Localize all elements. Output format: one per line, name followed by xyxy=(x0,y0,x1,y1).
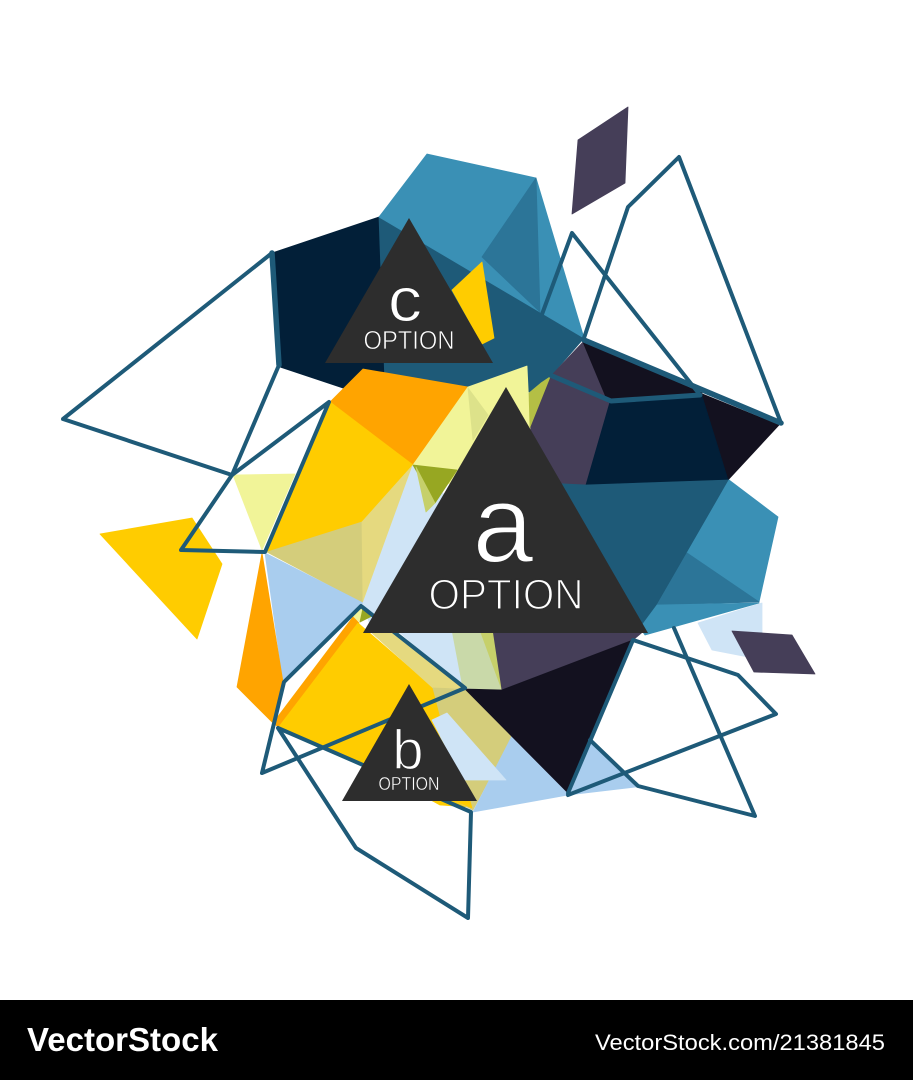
option c triangle: OPTION xyxy=(364,325,454,355)
option c triangle xyxy=(325,218,493,363)
option a triangle xyxy=(363,387,648,633)
option b triangle xyxy=(342,684,477,801)
blue polygon cluster: top xyxy=(272,154,584,392)
option b triangle: b xyxy=(392,718,424,781)
footer brand: VectorStock xyxy=(27,1021,219,1058)
decorative diamond: top right xyxy=(572,107,628,214)
dark polygon cluster: right xyxy=(530,342,779,635)
option b triangle: OPTION xyxy=(378,774,440,794)
option c triangle: c xyxy=(388,266,422,335)
wireframe outlines xyxy=(63,157,781,918)
footer bar xyxy=(0,1000,913,1080)
lower polygon cluster xyxy=(273,617,645,812)
option a triangle: a xyxy=(472,463,534,586)
footer url: VectorStock.com/21381845 xyxy=(595,1030,885,1055)
yellow and orange polygon cluster: centre left xyxy=(233,366,550,723)
yellow shard: left xyxy=(100,518,222,639)
decorative diamond: lower right with pale backing xyxy=(698,603,815,674)
option a triangle: OPTION xyxy=(428,571,584,619)
